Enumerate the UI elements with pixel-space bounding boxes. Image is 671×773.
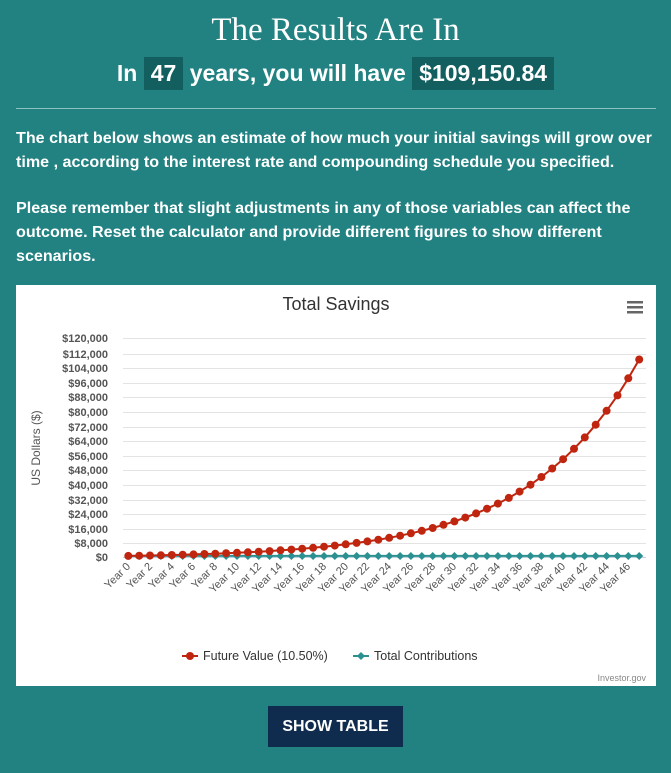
x axis labels: Year 26 [381, 561, 416, 596]
result summary: In years, you will have [117, 60, 406, 86]
y axis labels: $0 [96, 552, 108, 564]
legend: Total Contributions [374, 649, 478, 663]
y axis labels: $64,000 [68, 436, 108, 448]
legend [182, 649, 478, 663]
y axis labels: $48,000 [68, 465, 108, 477]
y axis labels: $72,000 [68, 422, 108, 434]
x axis labels: Year 44 [577, 561, 612, 596]
x axis labels: Year 22 [337, 561, 372, 596]
y axis labels: $80,000 [68, 407, 108, 419]
x axis labels: Year 2 [124, 561, 155, 591]
x axis labels: Year 40 [533, 561, 568, 596]
x axis labels: Year 46 [598, 561, 633, 596]
x axis labels: Year 24 [359, 561, 394, 596]
x axis labels: Year 28 [403, 561, 438, 596]
x axis labels: Year 30 [424, 561, 459, 596]
y axis labels: $8,000 [74, 538, 108, 550]
x axis labels: Year 42 [555, 561, 590, 596]
result summary: 47 [151, 60, 176, 86]
x axis labels: Year 8 [189, 561, 220, 591]
y axis labels [62, 333, 108, 564]
x axis labels: Year 20 [316, 561, 351, 596]
y axis labels: $32,000 [68, 495, 108, 507]
x axis labels: Year 32 [446, 561, 481, 596]
legend: Future Value (10.50%) [203, 649, 328, 663]
x axis labels: Year 16 [272, 561, 307, 596]
y axis labels: $112,000 [63, 349, 108, 361]
x axis labels: Year 14 [250, 561, 285, 596]
chart title: Total Savings [282, 294, 390, 314]
y axis title: US Dollars ($) [29, 410, 43, 486]
x axis labels: Year 38 [511, 561, 546, 596]
button: show table: SHOW TABLE [282, 718, 389, 735]
y axis labels: $120,000 [62, 333, 108, 345]
y axis labels: $96,000 [68, 378, 108, 390]
y axis labels: $56,000 [68, 451, 108, 463]
series: total contributions [124, 552, 643, 560]
icon: menu [627, 301, 643, 314]
result summary [117, 57, 554, 90]
title: The Results Are In [211, 12, 460, 48]
y axis labels: $16,000 [68, 524, 108, 536]
x axis labels: Year 12 [229, 561, 264, 596]
series: future value [124, 356, 643, 560]
credit: Investor.gov [597, 673, 646, 683]
y axis labels: $88,000 [68, 392, 108, 404]
text block: explanation: The chart below shows an estimate of how much your initial savings will grow over time , according to the interest rate and compounding schedule you specified. [16, 129, 652, 171]
x axis labels: Year 18 [294, 561, 329, 596]
text block: reminder: Please remember that slight adjustments in any of those variables can affect the outcome. Reset the calculator and provide different figures to show different scenarios. [16, 199, 630, 265]
y axis labels: $24,000 [68, 509, 108, 521]
x axis labels: Year 4 [146, 561, 177, 591]
chart panel [16, 285, 656, 686]
y axis labels: $104,000 [62, 363, 108, 375]
x axis labels [102, 561, 633, 596]
y axis labels: $40,000 [68, 480, 108, 492]
x axis labels: Year 36 [490, 561, 525, 596]
x axis labels: Year 0 [102, 561, 133, 591]
x axis labels: Year 6 [167, 561, 198, 591]
button: show table [268, 706, 403, 747]
x axis labels: Year 10 [207, 561, 242, 596]
result summary: $109,150.84 [419, 60, 547, 86]
x axis labels: Year 34 [468, 561, 503, 596]
